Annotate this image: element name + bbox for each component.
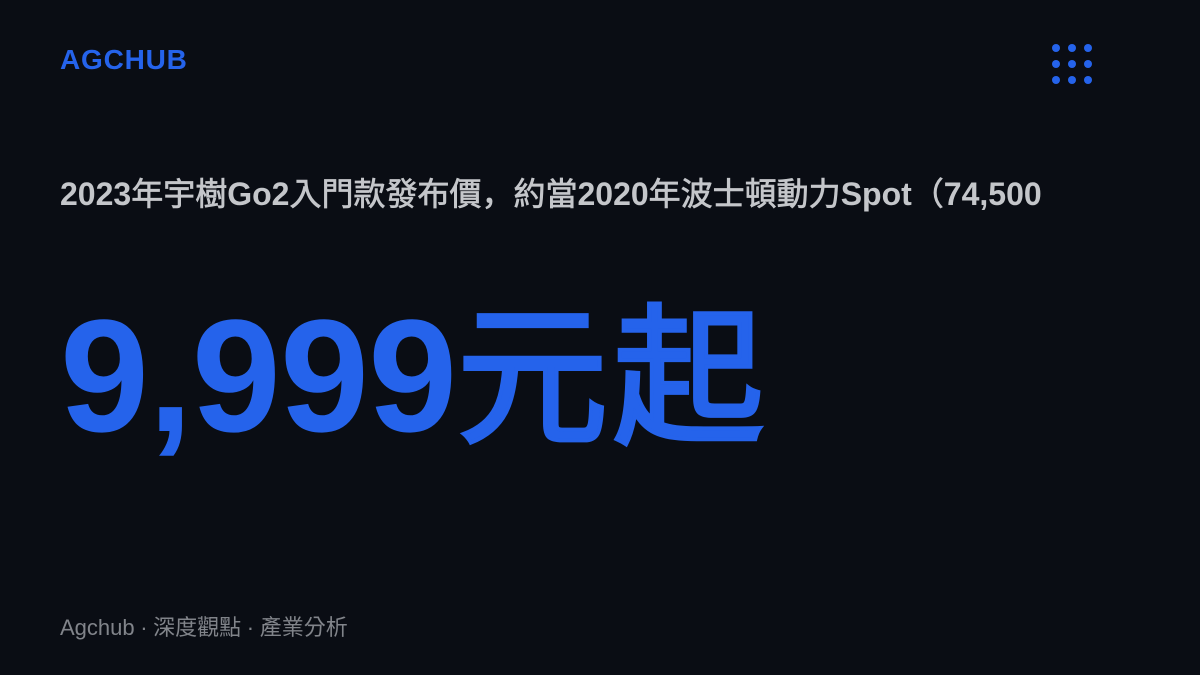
- icon: dot grid: [1052, 44, 1092, 84]
- headline stat: 9,999元起: [60, 286, 768, 465]
- brand logo text: AGCHUB: [60, 44, 188, 75]
- footer text: Agchub · 深度觀點 · 產業分析: [60, 615, 348, 640]
- subtitle text: 2023年宇樹Go2入門款發布價，約當2020年波士頓動力Spot（74,500: [60, 176, 1042, 212]
